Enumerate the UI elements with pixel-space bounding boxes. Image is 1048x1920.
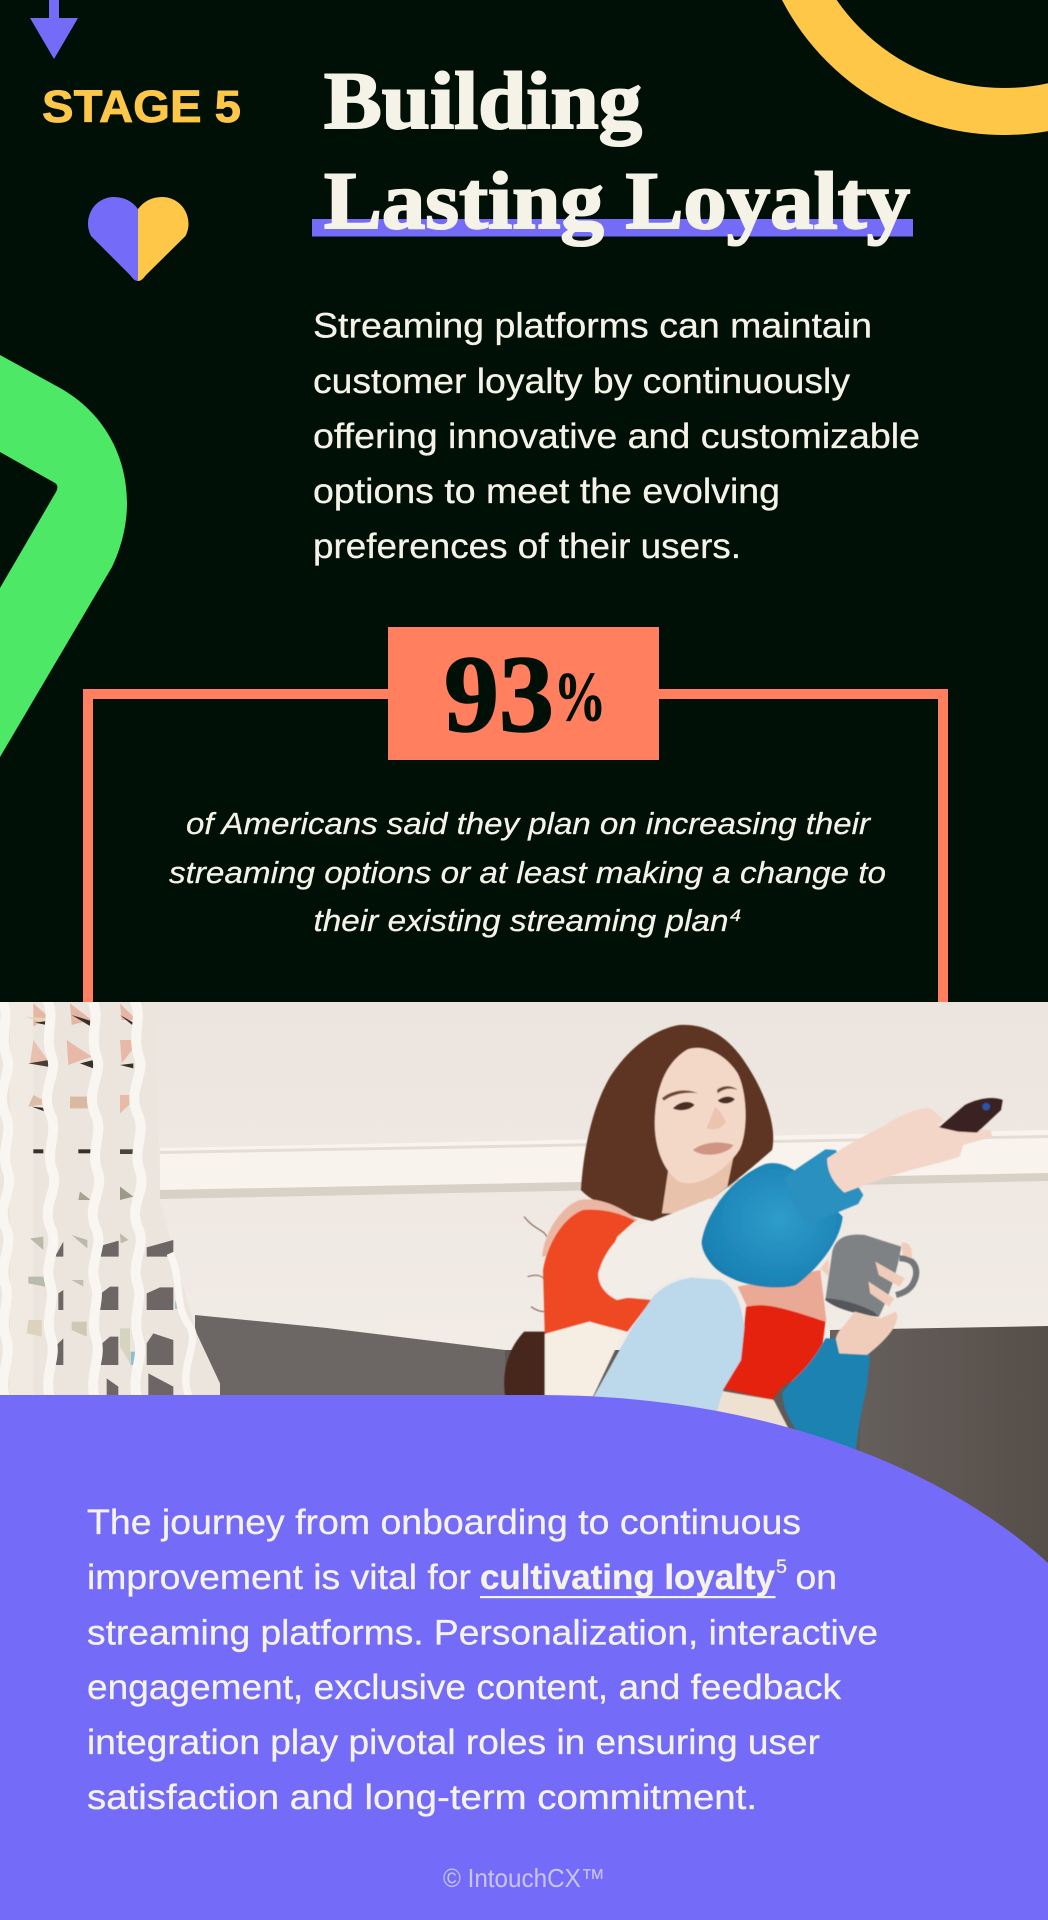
- purple closing panel: [0, 1395, 1048, 1920]
- decorative yellow ring: [778, 0, 1048, 112]
- stat frame: [83, 689, 948, 1002]
- face: [655, 1048, 746, 1183]
- closing paragraph: satisfaction and long-term commitment.: [87, 1778, 757, 1817]
- decorative green chevron: [0, 355, 127, 757]
- neck: [662, 1153, 734, 1213]
- intro paragraph: options to meet the evolving: [313, 472, 780, 511]
- stat description: of Americans said they plan on increasing their: [186, 806, 872, 841]
- photo: woman on sofa with remote: [0, 1000, 1048, 1602]
- braid and stray hair: [504, 1217, 546, 1397]
- pink shoulder: [542, 1199, 638, 1257]
- woman figure: [504, 1025, 1003, 1457]
- patterned curtain: [0, 1000, 220, 1400]
- stat badge: 93%: %: [554, 659, 606, 736]
- footer copyright: © IntouchCX™: [443, 1863, 605, 1893]
- sofa: [195, 1315, 1048, 1563]
- stat description: streaming options or at least making a change to: [169, 855, 886, 890]
- stat badge: 93%: 93: [444, 633, 554, 755]
- icon: down arrow: [30, 0, 78, 59]
- orange sweater: [543, 1210, 652, 1334]
- closing paragraph: cultivating loyalty: [480, 1558, 776, 1597]
- intro paragraph: [313, 306, 920, 566]
- closing paragraph: [87, 1503, 878, 1817]
- stage label: STAGE 5: [42, 81, 241, 132]
- hair: [581, 1025, 773, 1223]
- title: [324, 55, 910, 246]
- stat description: 4: [730, 906, 741, 925]
- lower blue cuff: [782, 1338, 870, 1457]
- remote control: [939, 1098, 1003, 1133]
- closing paragraph: improvement is vital for: [87, 1558, 471, 1597]
- blue cuff: [794, 1148, 864, 1213]
- hand holding mug: [820, 1243, 912, 1357]
- mug: [825, 1235, 916, 1317]
- closing paragraph: 5: [776, 1557, 787, 1578]
- intro paragraph: customer loyalty by continuously: [313, 362, 851, 401]
- blue sleeve: [701, 1163, 843, 1288]
- intro paragraph: offering innovative and customizable: [313, 417, 920, 456]
- closing paragraph: The journey from onboarding to continuous: [87, 1503, 801, 1542]
- title underline highlight: [312, 219, 913, 236]
- intro paragraph: Streaming platforms can maintain: [313, 306, 872, 346]
- stat badge: 93%: [388, 627, 659, 760]
- jeans: [594, 1277, 744, 1423]
- title: Lasting Loyalty: [324, 155, 910, 246]
- raised hand: [827, 1108, 992, 1193]
- intro paragraph: preferences of their users.: [313, 527, 741, 566]
- icon: two-tone heart: [88, 197, 188, 281]
- wall moulding: [160, 1130, 1048, 1199]
- stat description: their existing streaming plan: [314, 903, 728, 938]
- closing paragraph: engagement, exclusive content, and feedback: [87, 1668, 842, 1707]
- right sweater stripes: [713, 1270, 826, 1457]
- white sleeve: [598, 1198, 734, 1300]
- title: Building: [324, 55, 642, 146]
- white sweater band: [545, 1322, 622, 1397]
- closing paragraph: streaming platforms. Personalization, interactive: [87, 1614, 878, 1652]
- closing paragraph: on: [796, 1558, 837, 1597]
- closing paragraph: integration play pivotal roles in ensuring user: [87, 1723, 820, 1762]
- stat description: [169, 806, 886, 938]
